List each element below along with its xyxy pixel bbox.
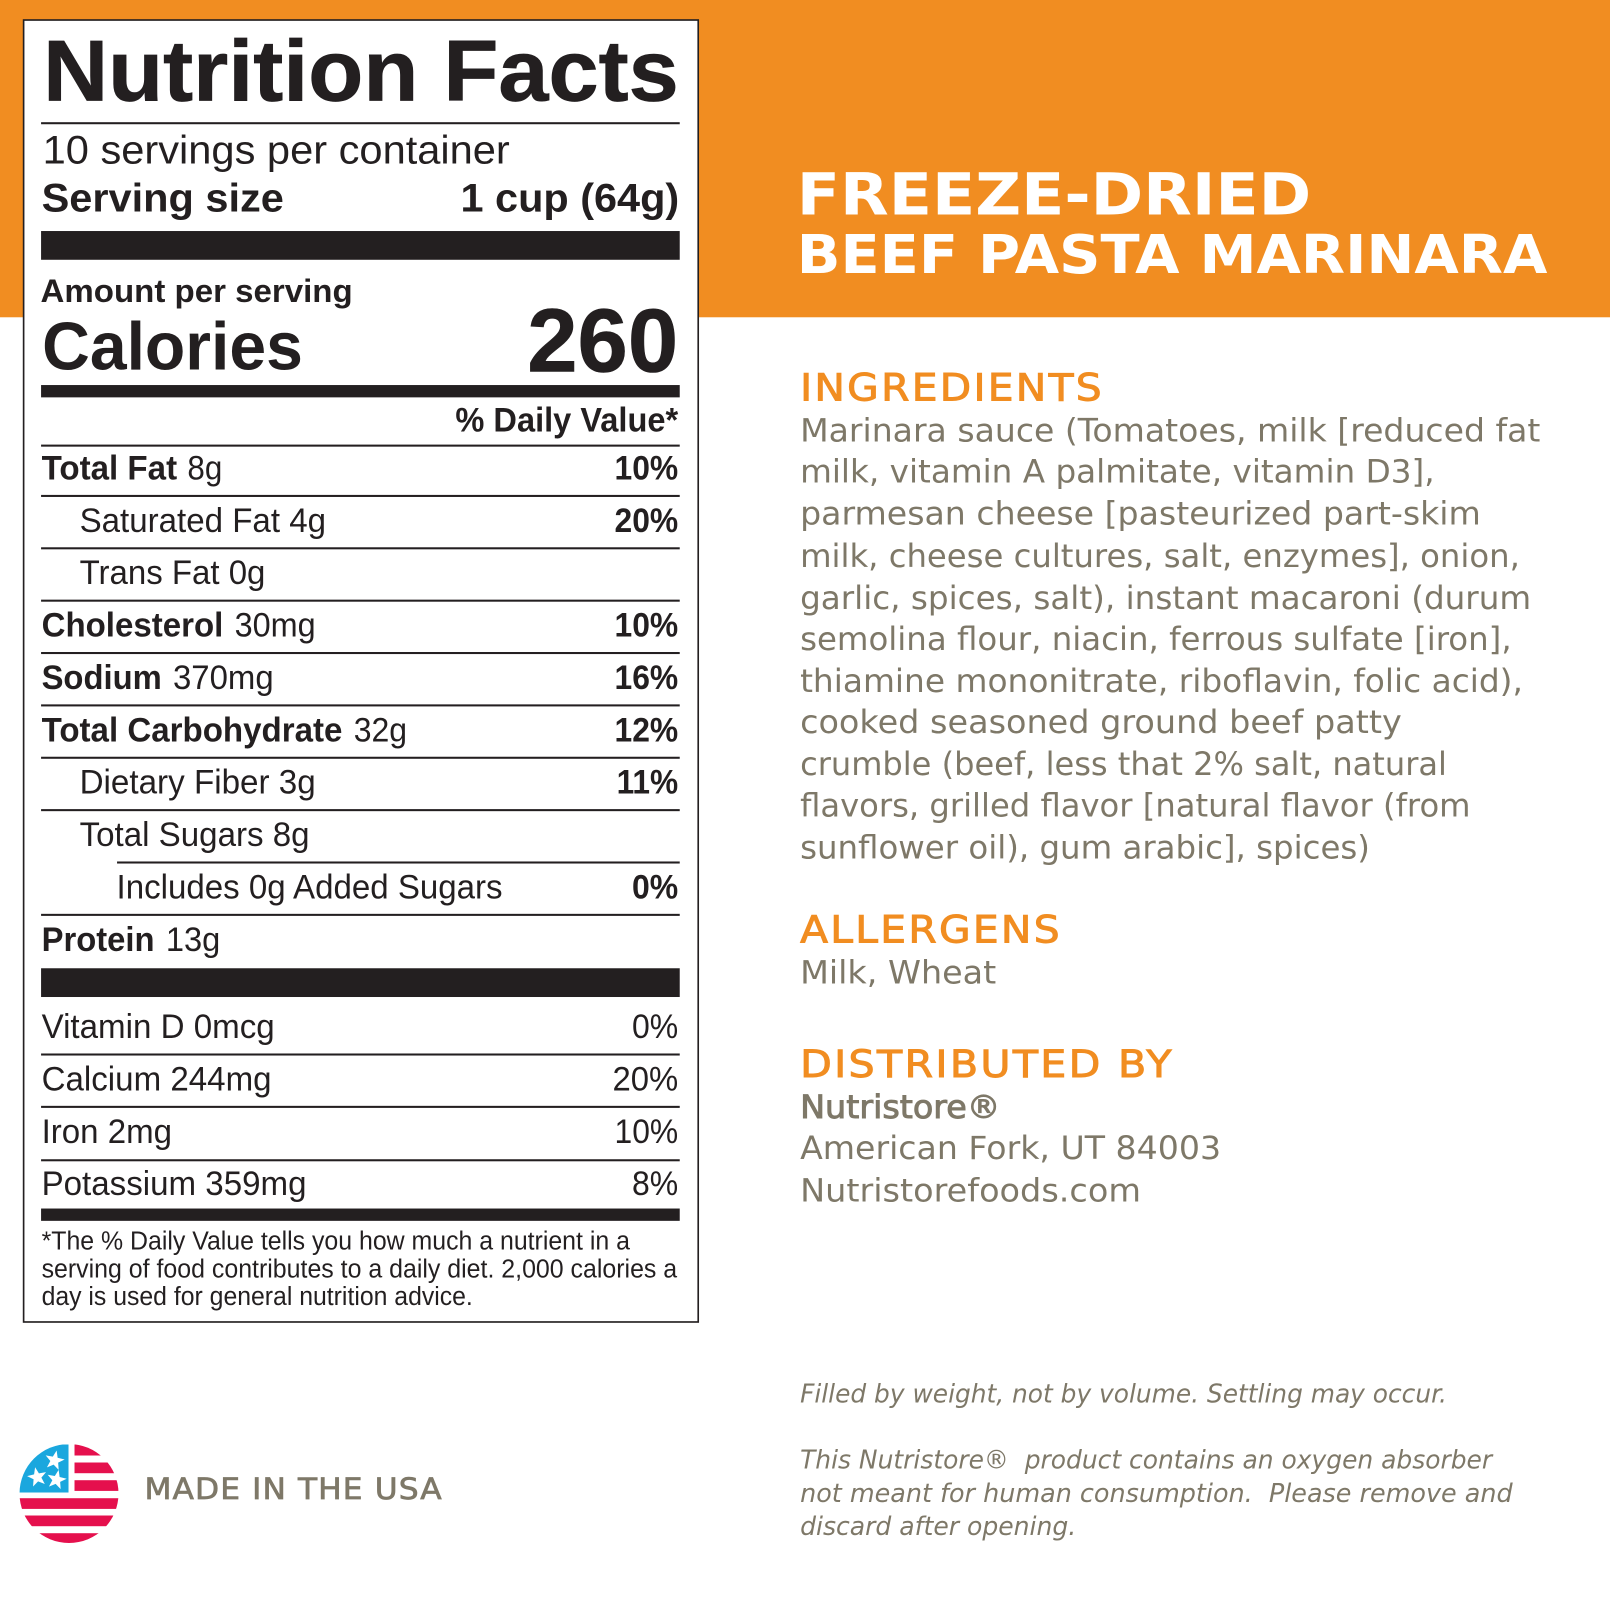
distributor details: American Fork, UT 84003: [800, 1129, 1221, 1167]
row: total fat: 10%: [615, 450, 678, 488]
row: total carbohydrate: [42, 711, 678, 749]
row: total carbohydrate: 32g: [354, 711, 407, 749]
row: added sugars: Includes 0g Added Sugars: [117, 868, 503, 906]
row: total carbohydrate: Total Carbohydrate: [42, 711, 342, 749]
row: cholesterol: 30mg: [235, 607, 316, 645]
row: total carbohydrate: 12%: [615, 711, 678, 749]
icon: usa flag: [20, 1445, 125, 1544]
row: calcium: 20%: [612, 1060, 678, 1098]
row: total fat: [42, 450, 678, 488]
heading: Nutrition Facts: Nutrition Facts: [43, 24, 679, 120]
ingredients text: flavors, grilled flavor [natural flavor (from: [800, 786, 1471, 824]
row: sodium: 370mg: [173, 659, 274, 697]
heading: ingredients: INGREDIENTS: [800, 366, 1104, 409]
oxygen absorber note: not meant for human consumption. Please remove and: [800, 1479, 1513, 1509]
row: iron: [42, 1113, 678, 1151]
row: added sugars: 0%: [632, 868, 678, 906]
row: saturated fat: Saturated Fat 4g: [80, 502, 326, 540]
row: dietary fiber: Dietary Fiber 3g: [80, 764, 316, 802]
footnote: [42, 1226, 678, 1311]
fill note: Filled by weight, not by volume. Settling may occur.: [800, 1380, 1447, 1410]
distributor details: Nutristore®: [800, 1088, 1000, 1126]
row: protein: Protein: [42, 921, 155, 959]
panel: nutrition facts label: [24, 20, 698, 1322]
calories row: 260: [527, 291, 678, 392]
row: protein: [42, 921, 220, 959]
ingredients text: thiamine mononitrate, riboflavin, folic acid),: [800, 662, 1523, 700]
row: protein: 13g: [166, 921, 220, 959]
oxygen absorber note: [800, 1445, 1513, 1542]
row: potassium: Potassium 359mg: [42, 1165, 306, 1203]
orange header band: [0, 0, 1610, 317]
footnote: *The % Daily Value tells you how much a nutrient in a: [42, 1226, 630, 1256]
calories row: [42, 291, 678, 392]
amount per serving: Amount per serving: [41, 272, 353, 309]
row: iron: 10%: [615, 1113, 678, 1151]
footnote: day is used for general nutrition advice.: [42, 1281, 473, 1311]
servings per container: 10 servings per container: [43, 128, 510, 172]
row: calcium: Calcium 244mg: [42, 1060, 272, 1098]
row: total fat: Total Fat: [42, 450, 177, 488]
title: BEEF PASTA MARINARA: [797, 223, 1548, 286]
row: total sugars: Total Sugars 8g: [80, 816, 310, 854]
row: potassium: 8%: [632, 1165, 678, 1203]
row: cholesterol: 10%: [615, 607, 678, 645]
row: dietary fiber: [80, 764, 678, 802]
ingredients text: [800, 412, 1540, 866]
title: [797, 162, 1548, 286]
ingredients text: sunflower oil), gum arabic], spices): [800, 828, 1370, 866]
ingredients text: cooked seasoned ground beef patty: [800, 703, 1402, 741]
made in the usa: MADE IN THE USA: [144, 1472, 443, 1506]
ingredients text: semolina flour, niacin, ferrous sulfate [iron],: [800, 620, 1512, 658]
row: cholesterol: [42, 607, 678, 645]
serving size row: 1 cup (64g): [461, 177, 679, 221]
label box: [24, 20, 698, 1322]
row: saturated fat: 20%: [615, 502, 678, 540]
serving size row: Serving size: [42, 177, 284, 221]
row: sodium: [42, 659, 678, 697]
row: calcium: [42, 1060, 678, 1098]
row: cholesterol: Cholesterol: [42, 607, 223, 645]
row: vitamin d: 0%: [632, 1008, 678, 1046]
ingredients text: Marinara sauce (Tomatoes, milk [reduced fat: [800, 412, 1540, 450]
oxygen absorber note: discard after opening.: [800, 1512, 1076, 1542]
row: sodium: Sodium: [42, 659, 162, 697]
row: sodium: 16%: [615, 659, 678, 697]
calories row: Calories: [42, 310, 303, 385]
row: vitamin d: [42, 1008, 678, 1046]
ingredients text: crumble (beef, less that 2% salt, natural: [800, 745, 1447, 783]
ingredients text: milk, cheese cultures, salt, enzymes], onion,: [800, 537, 1520, 575]
row: saturated fat: [80, 502, 678, 540]
serving size row: [42, 177, 679, 221]
daily value heading: % Daily Value*: [455, 401, 679, 439]
title: FREEZE-DRIED: [797, 162, 1311, 229]
distributor details: [800, 1088, 1221, 1209]
row: iron: Iron 2mg: [42, 1113, 172, 1151]
row: dietary fiber: 11%: [617, 764, 678, 802]
ingredients text: parmesan cheese [pasteurized part-skim: [800, 495, 1481, 533]
oxygen absorber note: This Nutristore® product contains an oxygen absorber: [800, 1445, 1494, 1475]
allergens text: Milk, Wheat: [800, 954, 996, 992]
heading: allergens: ALLERGENS: [800, 909, 1062, 952]
distributor details: Nutristorefoods.com: [800, 1171, 1141, 1209]
row: vitamin d: Vitamin D 0mcg: [42, 1008, 275, 1046]
heading: distributed by: DISTRIBUTED BY: [800, 1043, 1174, 1086]
row: total fat: 8g: [187, 450, 222, 488]
row: potassium: [42, 1165, 678, 1203]
row: trans fat: Trans Fat 0g: [80, 554, 265, 592]
ingredients text: milk, vitamin A palmitate, vitamin D3],: [800, 453, 1435, 491]
footnote: serving of food contributes to a daily diet. 2,000 calories a: [42, 1253, 678, 1283]
ingredients text: garlic, spices, salt), instant macaroni (durum: [800, 579, 1531, 617]
